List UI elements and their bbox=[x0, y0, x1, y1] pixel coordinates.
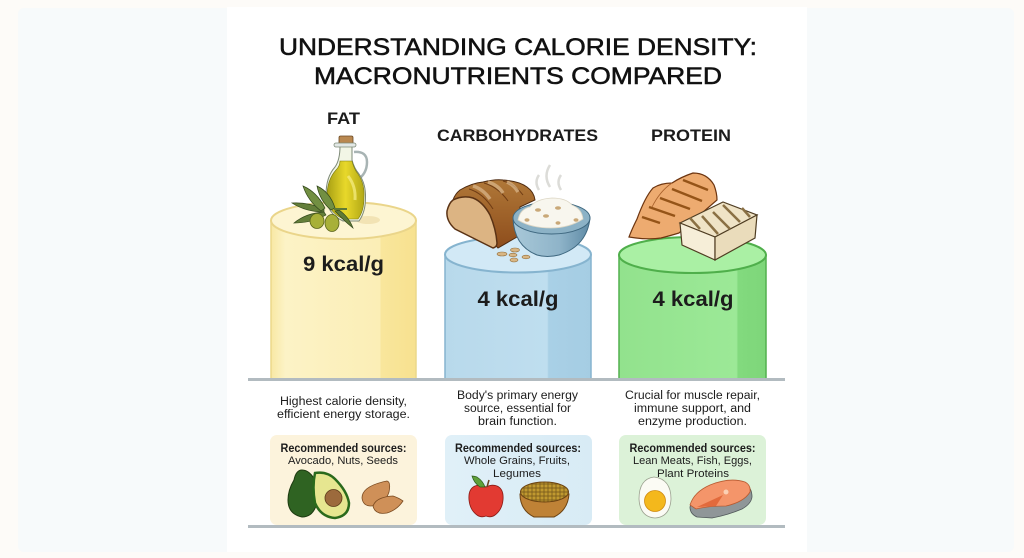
text: protein sources: Lean Meats, Fish, Eggs, bbox=[633, 455, 752, 467]
icon: grains bbox=[497, 248, 530, 262]
description: carbohydrates bbox=[457, 390, 578, 428]
icon: boiled egg bbox=[639, 477, 671, 518]
cylinder: fat bbox=[271, 202, 416, 379]
description: fat: efficient energy storage. bbox=[277, 409, 410, 421]
baseline divider bbox=[248, 378, 785, 381]
icon: grilled chicken breast bbox=[629, 173, 717, 239]
description: protein: immune support, and bbox=[634, 403, 751, 415]
white content panel bbox=[227, 7, 807, 552]
text: protein sources bbox=[630, 443, 756, 480]
panel: fat sources bbox=[270, 435, 417, 525]
cylinder: carbohydrates bbox=[445, 236, 591, 379]
value: protein: 4 kcal/g bbox=[652, 288, 734, 311]
value: carbohydrates: 4 kcal/g bbox=[478, 288, 558, 311]
bottom divider bbox=[248, 525, 785, 528]
text: carbohydrates sources: Recommended sources: bbox=[455, 443, 581, 455]
text: carbohydrates sources: Whole Grains, Fruits, bbox=[464, 455, 570, 467]
text: carbohydrates sources bbox=[455, 443, 581, 480]
text: protein sources: Recommended sources: bbox=[630, 443, 756, 455]
title: MACRONUTRIENTS COMPARED bbox=[314, 63, 722, 90]
icon: olive oil bottle with olives bbox=[292, 136, 367, 232]
text: carbohydrates sources: Legumes bbox=[493, 468, 542, 480]
title bbox=[279, 34, 757, 90]
description: protein bbox=[625, 390, 760, 428]
text: fat sources: Recommended sources: bbox=[280, 443, 406, 455]
text: fat sources bbox=[280, 443, 406, 467]
icon: apple bbox=[469, 476, 503, 517]
description: carbohydrates: Body's primary energy bbox=[457, 390, 578, 402]
text: protein sources: Plant Proteins bbox=[657, 468, 730, 480]
icon: rice bowl with steam bbox=[513, 165, 590, 256]
column heading: carbohydrates: CARBOHYDRATES bbox=[437, 126, 598, 145]
icon: lentil bowl bbox=[520, 482, 569, 517]
title: UNDERSTANDING CALORIE DENSITY: bbox=[279, 34, 757, 61]
panel: carbohydrates sources bbox=[445, 435, 592, 525]
icon: grilled tofu bbox=[680, 202, 757, 260]
value: fat: 9 kcal/g bbox=[303, 253, 384, 276]
description: fat: Highest calorie density, bbox=[280, 396, 407, 408]
description: protein: Crucial for muscle repair, bbox=[625, 390, 760, 402]
icon: avocado bbox=[288, 470, 349, 518]
description: carbohydrates: source, essential for bbox=[464, 403, 571, 415]
cylinder: protein bbox=[619, 237, 766, 379]
icon: bread loaf bbox=[447, 180, 535, 248]
description: carbohydrates: brain function. bbox=[478, 416, 557, 428]
description: fat bbox=[277, 396, 410, 421]
column heading: fat: FAT bbox=[327, 109, 361, 128]
icon: almonds bbox=[362, 481, 403, 513]
text: fat sources: Avocado, Nuts, Seeds bbox=[288, 455, 398, 467]
icon: salmon steak bbox=[690, 480, 752, 518]
panel: protein sources bbox=[619, 435, 766, 525]
column heading: protein: PROTEIN bbox=[651, 126, 731, 145]
description: protein: enzyme production. bbox=[638, 416, 747, 428]
